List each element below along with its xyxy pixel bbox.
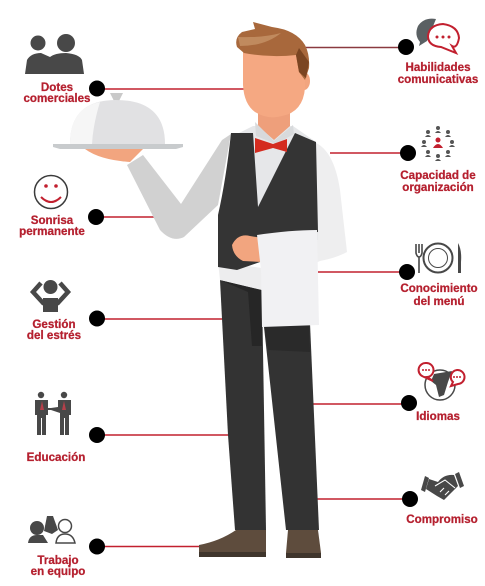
icon: stressed person (33, 280, 68, 312)
label: Compromiso (406, 513, 478, 526)
dot (399, 264, 415, 280)
item: Dotes comerciales (23, 34, 105, 105)
dot (398, 39, 414, 55)
item: Idiomas (401, 363, 465, 423)
icon: high five (28, 516, 75, 543)
waiter shirt band under waistcoat (218, 262, 262, 290)
label: del estrés (27, 329, 81, 342)
serving cloche and tray (53, 93, 183, 149)
waiter trousers (220, 280, 319, 530)
item: Trabajo en equipo (28, 516, 105, 578)
label: Dotes (41, 81, 73, 94)
waiter collar (255, 122, 294, 144)
icon: speech bubbles (416, 19, 459, 53)
label: Idiomas (416, 410, 460, 423)
label: Conocimiento (400, 282, 478, 295)
illustration: waiter (53, 22, 347, 558)
icon: people network (421, 126, 455, 161)
icon: two people shaking hands (35, 392, 71, 435)
label: del menú (414, 295, 464, 308)
icon: smiley (34, 176, 68, 208)
bow tie (255, 138, 287, 153)
waiter shirt (218, 126, 318, 240)
label: organización (402, 181, 474, 194)
item: Conocimiento del menú (399, 243, 478, 308)
item: Educación (27, 392, 105, 464)
waiter neck (258, 100, 290, 140)
item: Capacidad de organización (400, 126, 476, 194)
waiter face (243, 50, 305, 117)
dot (89, 538, 105, 554)
icon: handshake (421, 472, 464, 500)
label: Capacidad de (400, 169, 476, 182)
waiter serving arm (127, 134, 231, 239)
item: Sonrisa permanente (19, 176, 104, 238)
dot (88, 209, 104, 225)
waiter hand under tray (85, 149, 143, 162)
label: Sonrisa (31, 214, 73, 227)
label: comunicativas (398, 73, 478, 86)
waiter right sleeve (300, 142, 347, 270)
dot (89, 80, 105, 96)
item: Compromiso (402, 472, 478, 526)
label: Habilidades (405, 61, 471, 74)
icon: plate and cutlery (416, 243, 461, 273)
folded towel (257, 230, 319, 327)
waiter resting hand (232, 235, 262, 262)
icon: globe with speech bubbles (419, 363, 465, 400)
waiter ear (298, 72, 310, 90)
label: comerciales (23, 92, 91, 105)
label: Educación (27, 451, 85, 464)
label: permanente (19, 225, 85, 238)
dot (89, 427, 105, 443)
waiter shoes (199, 530, 321, 558)
dot (89, 310, 105, 326)
waiter hair (236, 22, 309, 80)
item: Gestión del estrés (27, 280, 105, 342)
dot (401, 395, 417, 411)
waiter waistcoat (218, 133, 318, 270)
label: Trabajo (37, 554, 79, 567)
connector lines (96, 48, 410, 546)
item: Habilidades comunicativas (398, 19, 478, 86)
icon: two people (25, 34, 84, 74)
dot (402, 491, 418, 507)
dot (400, 145, 416, 161)
label: Gestión (32, 318, 76, 331)
label: en equipo (31, 565, 85, 578)
